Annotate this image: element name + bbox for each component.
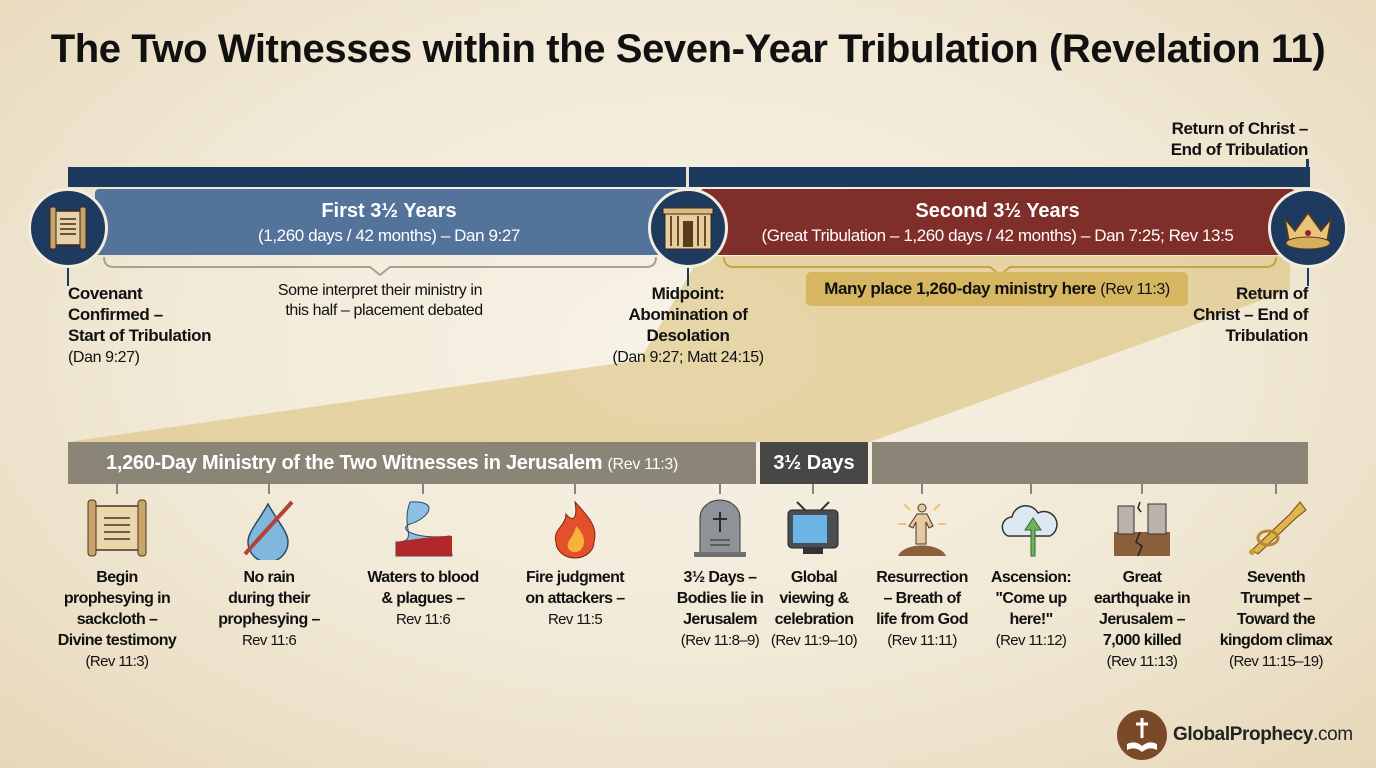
first half bar: First 3½ Years: [321, 200, 457, 222]
text: (Rev 11:12): [996, 632, 1066, 649]
label: covenant: Confirmed –: [68, 305, 163, 324]
label: covenant: (Dan 9:27): [68, 349, 140, 366]
first half bar: (1,260 days / 42 months) – Dan 9:27: [258, 226, 520, 245]
label: midpoint: Desolation: [647, 326, 729, 345]
note: first half: Some interpret their ministry in: [278, 282, 482, 299]
icons row: [88, 500, 1307, 560]
label: return of christ: Return of: [1236, 284, 1308, 303]
label: return of christ: Tribulation: [1226, 326, 1308, 345]
logo: GlobalProphecy.com: [1173, 724, 1353, 745]
text: – Breath of: [884, 590, 960, 607]
icon: trumpet: [1249, 502, 1306, 555]
text: prophesying –: [218, 611, 320, 628]
second half bar: Second 3½ Years: [915, 200, 1080, 222]
text: No rain: [244, 569, 294, 586]
icon: no rain: [245, 502, 292, 562]
text: Rev 11:6: [396, 611, 450, 628]
icon: tv: [788, 502, 838, 554]
item texts: Begin: [96, 569, 138, 586]
text: Trumpet –: [1240, 590, 1312, 607]
text: life from God: [876, 611, 968, 628]
text: 7,000 killed: [1103, 632, 1181, 649]
text: Waters to blood: [367, 569, 479, 586]
logo: [1117, 710, 1353, 760]
text: Fire judgment: [526, 569, 624, 586]
item texts: prophesying in: [64, 590, 170, 607]
text: Rev 11:5: [548, 611, 602, 628]
icon: scroll circle: [28, 188, 108, 268]
brace second half: [723, 257, 1277, 272]
remaining bar: [872, 442, 1308, 484]
ministry bar: [68, 442, 756, 484]
text: "Come up: [995, 590, 1067, 607]
first half bar: [95, 189, 683, 255]
text: Great: [1123, 569, 1161, 586]
second half bar: (Great Tribulation – 1,260 days / 42 months) – Dan 7:25; Rev 13:5: [761, 226, 1234, 245]
label: midpoint: Abomination of: [628, 305, 748, 324]
icon: scroll: [88, 500, 146, 556]
text: viewing &: [779, 590, 849, 607]
text: Seventh: [1247, 569, 1305, 586]
label: midpoint: Midpoint:: [652, 284, 724, 303]
ministry bar: 1,260-Day Ministry of the Two Witnesses in Jerusalem (Rev 11:3): [106, 452, 678, 474]
text: Toward the: [1237, 611, 1315, 628]
item texts: (Rev 11:3): [86, 653, 148, 670]
note: first half: [278, 282, 483, 319]
item texts: Divine testimony: [58, 632, 176, 649]
text: celebration: [775, 611, 853, 628]
icon: tombstone: [694, 500, 746, 557]
item texts: sackcloth –: [77, 611, 157, 628]
text: (Rev 11:8–9): [681, 632, 759, 649]
text: Ascension:: [991, 569, 1071, 586]
second half bar: [700, 189, 1295, 255]
icon: fire: [555, 502, 595, 558]
3.5 days bar: [760, 442, 868, 484]
callout: many place ministry here: Many place 1,260-day ministry here (Rev 11:3): [824, 279, 1170, 298]
icon: waters to blood: [396, 502, 452, 556]
text: (Rev 11:9–10): [771, 632, 857, 649]
ticks under circles: [67, 260, 69, 286]
label: midpoint: (Dan 9:27; Matt 24:15): [612, 349, 764, 366]
label: return of christ top: [1171, 119, 1308, 159]
icon: temple circle: [648, 188, 728, 268]
text: kingdom climax: [1220, 632, 1332, 649]
title: The Two Witnesses within the Seven-Year Tribulation (Revelation 11): [51, 27, 1325, 71]
text: Resurrection: [876, 569, 968, 586]
label: return of christ top: End of Tribulation: [1171, 140, 1308, 159]
label: return of christ: Christ – End of: [1193, 305, 1308, 324]
text: 3½ Days –: [684, 569, 756, 586]
text: Jerusalem: [683, 611, 757, 628]
navy timeline bar: [68, 167, 1310, 187]
icon: earthquake: [1114, 502, 1170, 556]
label: return of christ top: Return of Christ –: [1172, 119, 1308, 138]
text: Rev 11:6: [242, 632, 296, 649]
3.5 days bar: 3½ Days: [773, 452, 855, 474]
label: covenant: [68, 284, 211, 366]
text: earthquake in: [1094, 590, 1190, 607]
callout: many place ministry here: [806, 272, 1188, 306]
label: covenant: Covenant: [68, 284, 142, 303]
text: (Rev 11:11): [887, 632, 957, 649]
text: during their: [228, 590, 310, 607]
icon: crown circle: [1268, 188, 1348, 268]
text: here!": [1009, 611, 1053, 628]
text: (Rev 11:15–19): [1229, 653, 1323, 670]
label: midpoint: [612, 284, 764, 366]
text: (Rev 11:13): [1107, 653, 1177, 670]
label: covenant: Start of Tribulation: [68, 326, 211, 345]
note: first half: this half – placement debated: [285, 302, 483, 319]
text: Bodies lie in: [677, 590, 763, 607]
icon: resurrection: [898, 504, 946, 556]
item texts: [58, 569, 177, 670]
icon: cloud ascension: [1002, 506, 1057, 556]
text: Global: [791, 569, 837, 586]
text: Jerusalem –: [1099, 611, 1185, 628]
text: & plagues –: [381, 590, 465, 607]
text: on attackers –: [525, 590, 625, 607]
label: return of christ: [1193, 284, 1308, 345]
brace first half: [103, 257, 657, 276]
